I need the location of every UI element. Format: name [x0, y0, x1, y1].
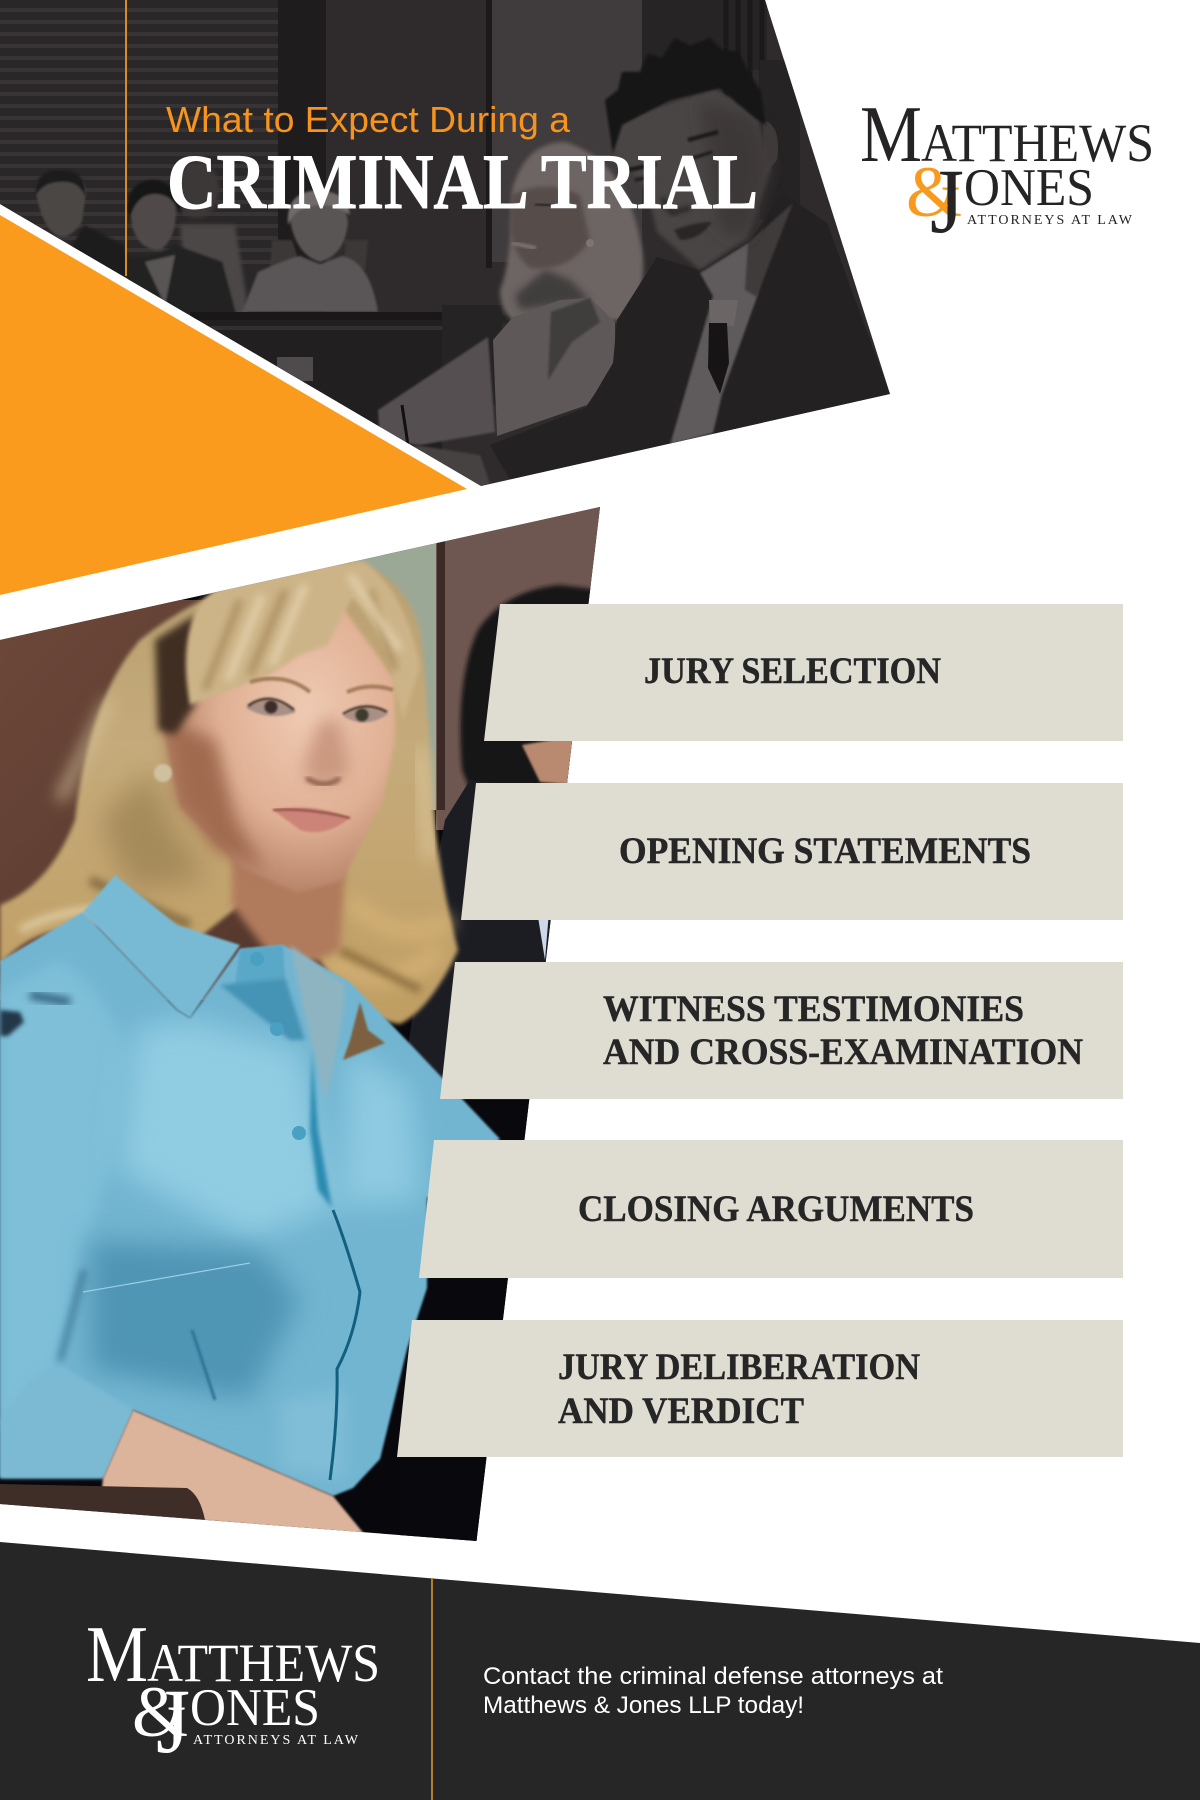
collar [83, 875, 240, 1018]
hand [414, 445, 490, 490]
logo: Matthews & Jones header: M [860, 89, 922, 179]
juror older woman [242, 190, 378, 312]
step 5: jury deliberation: AND VERDICT [558, 1391, 804, 1432]
hair [605, 38, 766, 153]
step 2: opening statements [461, 783, 1123, 920]
chest highlight [120, 1020, 335, 1240]
eyebrows and eyes [250, 679, 393, 692]
contact text: Contact the criminal defense attorneys at [483, 1663, 943, 1690]
step 3: witness testimonies: WITNESS TESTIMONIES [603, 989, 1024, 1030]
step 1: jury selection [484, 604, 1123, 741]
placket [290, 945, 345, 1100]
step 5: jury deliberation: JURY DELIBERATION [558, 1347, 920, 1388]
door panels and pillars [486, 0, 800, 323]
face [154, 561, 420, 893]
cheek shadow [165, 720, 265, 870]
footer divider [431, 1578, 433, 1800]
woman arm [378, 337, 495, 445]
logo: Matthews & Jones footer [86, 1609, 380, 1772]
juror behind [175, 162, 250, 320]
dark creases [0, 1010, 24, 1036]
logo: Matthews & Jones footer: J [156, 1670, 190, 1772]
step 3: witness testimonies: AND CROSS-EXAMINATION [603, 1032, 1083, 1073]
hair back [0, 560, 458, 1024]
shirt [670, 243, 762, 445]
logo: Matthews & Jones header [860, 89, 1154, 252]
logo: Matthews & Jones header: ATTORNEYS AT LAW [967, 213, 1133, 228]
panel: courtroom photo header [0, 0, 900, 500]
jurors [36, 162, 378, 320]
woman shirt [493, 298, 615, 436]
subtitle: What to Expect During a [166, 99, 571, 140]
title: CRIMINAL TRIAL [167, 138, 758, 225]
panel: woman photo [0, 500, 610, 1560]
logo: Matthews & Jones header: ONES [964, 159, 1094, 217]
jury box [190, 305, 502, 452]
vertical accent line [125, 0, 127, 276]
cuff [0, 1365, 133, 1478]
man behind: hair, ear, suit [400, 585, 600, 1560]
woman hair [500, 142, 643, 325]
logo: Matthews & Jones footer: ONES [190, 1679, 320, 1737]
mouth [674, 222, 712, 240]
step 3: witness testimonies [440, 962, 1123, 1099]
sleeve left [0, 960, 127, 1430]
suit [490, 193, 890, 480]
hair lock over collar [343, 1002, 385, 1060]
orange triangle [0, 215, 467, 595]
step 4: closing arguments: CLOSING ARGUMENTS [578, 1189, 974, 1230]
man in suit [490, 38, 890, 480]
logo: Matthews & Jones footer: & [132, 1672, 188, 1752]
background wood and wall [0, 500, 610, 1000]
earring [154, 764, 172, 782]
neck and chest [228, 860, 348, 964]
armrest [0, 1484, 205, 1520]
step 2: opening statements: OPENING STATEMENTS [619, 831, 1031, 872]
juror far left [34, 170, 128, 276]
blue shirt [0, 875, 500, 1496]
logo: Matthews & Jones footer: ATTHEWS [147, 1633, 380, 1693]
logo: Matthews & Jones footer: ATTORNEYS AT LAW [193, 1733, 359, 1748]
step 1: jury selection: JURY SELECTION [644, 651, 941, 692]
nose [304, 720, 350, 784]
panel: footer [0, 1542, 1200, 1800]
eyes and brows [628, 132, 718, 170]
buttons [250, 952, 306, 1140]
hair shadow by temple [155, 615, 195, 735]
lower shadow [90, 1240, 300, 1400]
juror young man [127, 180, 236, 314]
logo: Matthews & Jones header: J [930, 150, 964, 252]
seated woman [378, 142, 643, 490]
logo: Matthews & Jones header: ATTHEWS [921, 113, 1154, 173]
face [613, 88, 770, 270]
lips [273, 807, 350, 832]
blinds [0, 0, 326, 315]
step 4: closing arguments [419, 1140, 1123, 1278]
woman face [510, 186, 590, 268]
ear [763, 121, 778, 168]
logo: Matthews & Jones footer: M [86, 1609, 148, 1699]
fringe [186, 561, 420, 720]
logo: Matthews & Jones header: & [906, 152, 962, 232]
forearm [100, 1410, 365, 1535]
contact text [483, 1663, 943, 1719]
contact text: Matthews & Jones LLP today! [483, 1692, 804, 1719]
nose [662, 198, 690, 213]
step 5: jury deliberation [397, 1320, 1123, 1457]
